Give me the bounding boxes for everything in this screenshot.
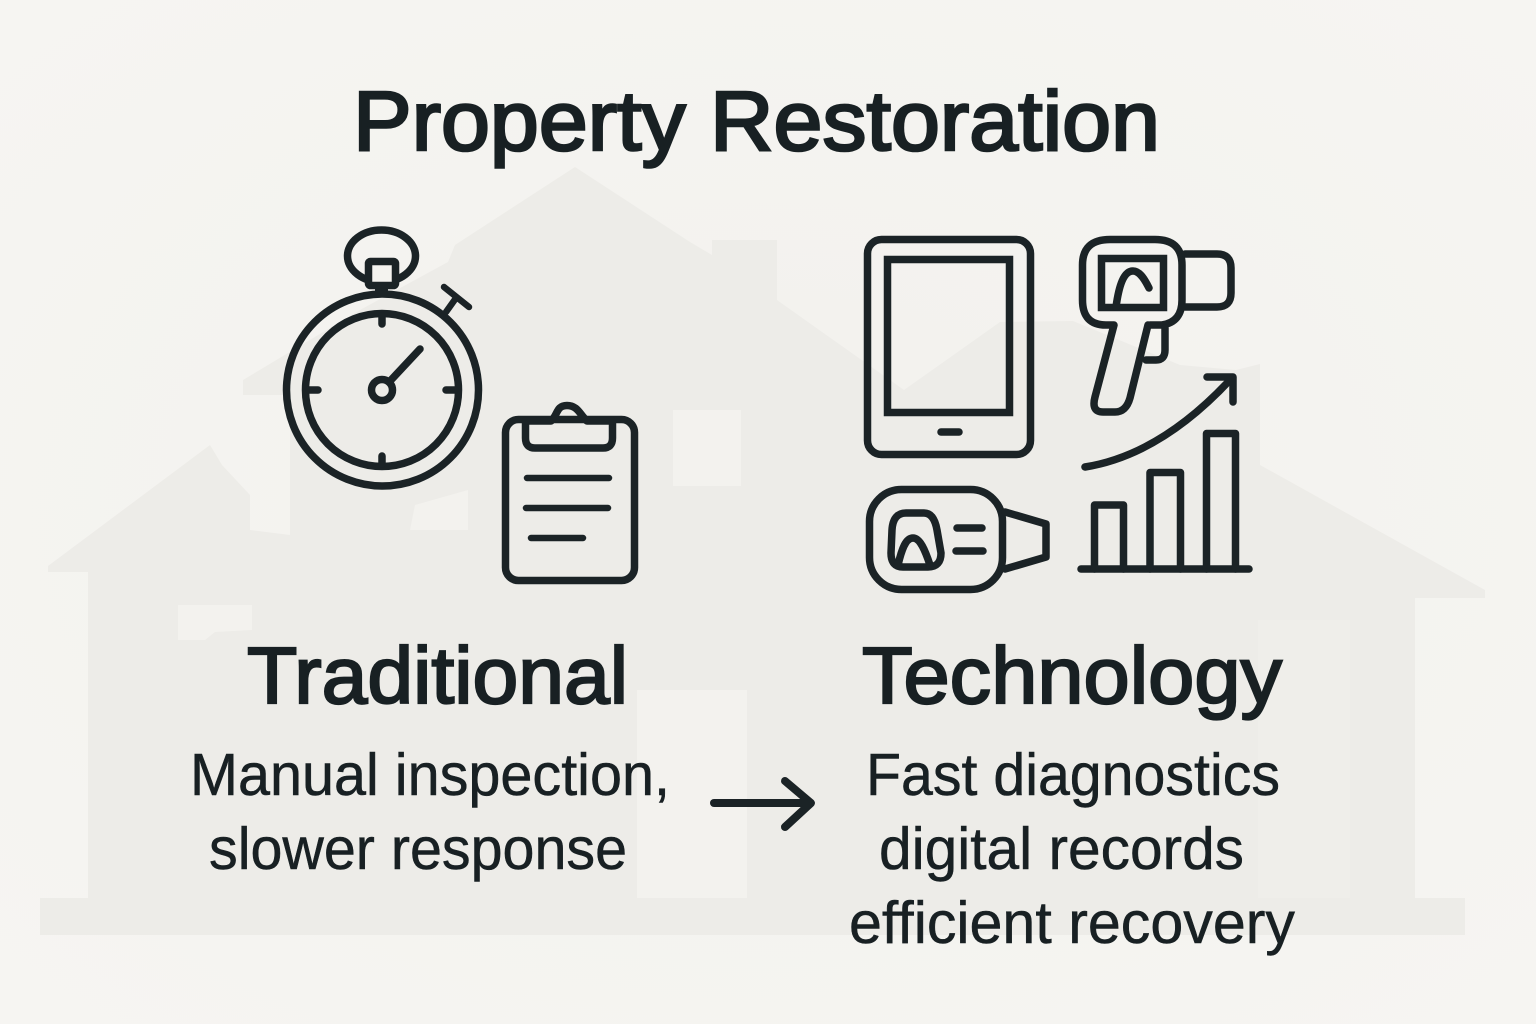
text: traditional description [190,742,670,882]
icon: clipboard [506,406,634,580]
text: traditional description: Manual inspection, [190,742,670,808]
text: technology description: efficient recovery [849,890,1295,956]
text: traditional description: slower response [209,816,627,882]
text: technology description: digital records [879,816,1244,882]
icon: rising trend arrow [1085,377,1233,467]
icon: thermal scanner [1082,240,1231,412]
background: house silhouette [40,167,1485,935]
text: technology description [849,742,1295,956]
icon: bar chart [1081,434,1249,569]
icon: tablet [868,240,1030,454]
title: Property Restoration [353,74,1160,168]
icon: moisture meter [870,490,1046,590]
arrow: traditional to technology [714,781,811,827]
icon: stopwatch [286,230,478,486]
heading: Traditional: Traditional [247,631,628,720]
heading: Technology: Technology [862,631,1282,720]
text: technology description: Fast diagnostics [866,742,1280,808]
